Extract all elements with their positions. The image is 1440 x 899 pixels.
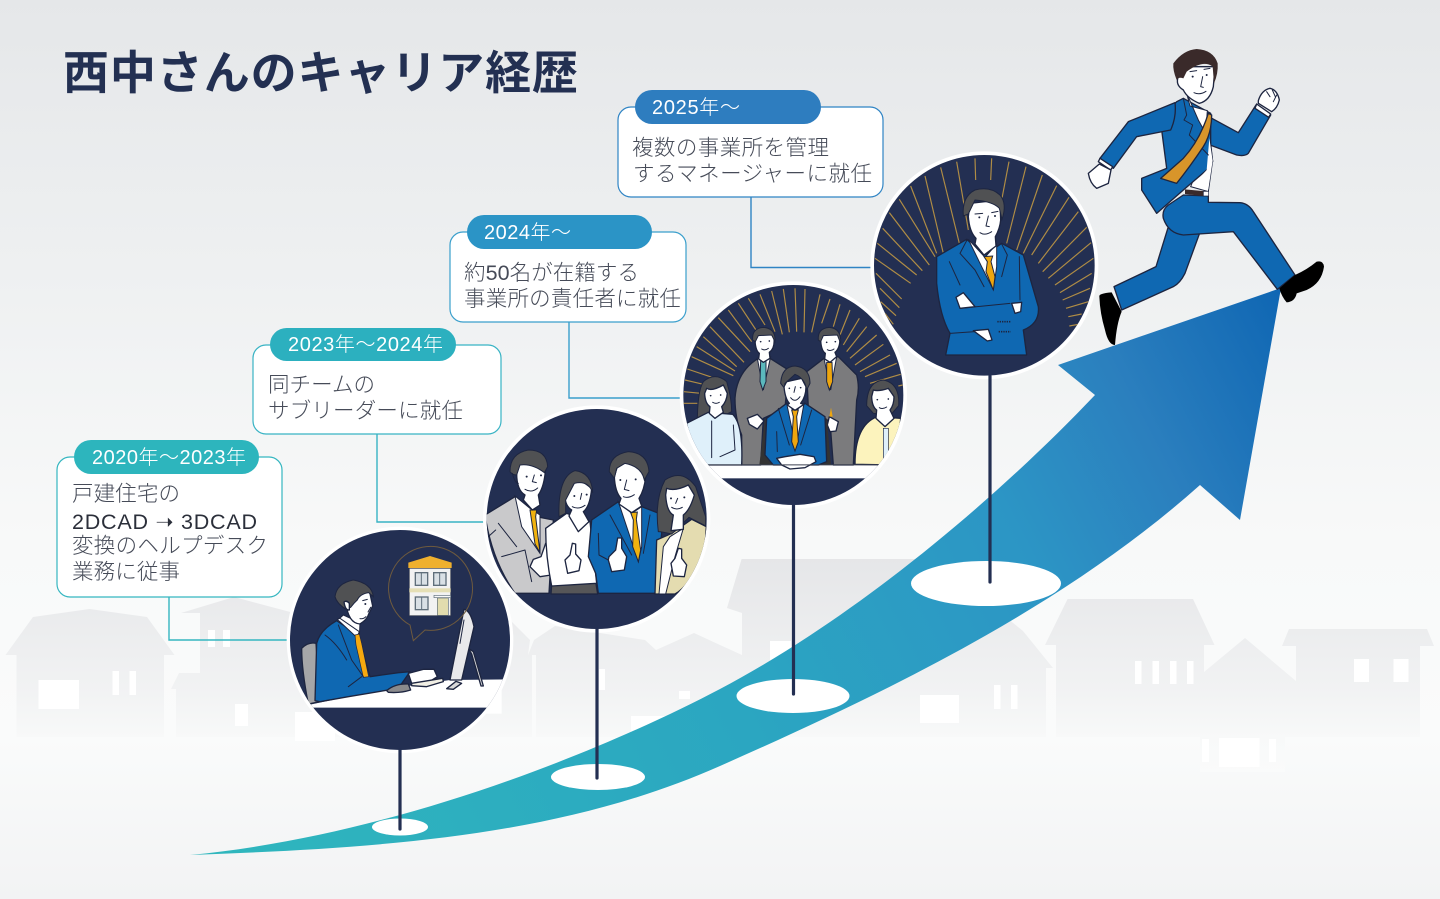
- connector 2: [377, 434, 489, 522]
- callout 3: 2024: 2024年〜: [484, 221, 571, 244]
- circle 2: team thumbs up: [483, 405, 710, 633]
- career growth arrow: [190, 288, 1281, 855]
- desk: [308, 679, 513, 708]
- callout 4: 2025: 2025年〜: [652, 96, 740, 119]
- callout 1: 2020-2023: 戸建住宅の: [72, 482, 180, 506]
- thought bubble with house: [389, 546, 473, 641]
- front leg: [1163, 195, 1295, 289]
- worker: [315, 580, 437, 702]
- person: right woman: [855, 380, 901, 465]
- monitor: [447, 609, 483, 689]
- person: woman in white shirt: [546, 471, 598, 594]
- title: 西中さんのキャリア経歴: [63, 47, 578, 99]
- front arm and hand: [1088, 103, 1175, 188]
- callout 3: 2024: 約50名が在籍する: [464, 261, 639, 285]
- person: back left man: [735, 327, 788, 465]
- connector 4: [751, 197, 876, 268]
- person: left woman: [687, 377, 742, 465]
- callout 1: 2020-2023: [57, 440, 282, 597]
- callout 3: 2024: [450, 215, 686, 322]
- callout 4: 2025: 複数の事業所を管理: [632, 136, 829, 160]
- callout 1: 2020-2023: 2DCAD ➝ 3DCAD: [72, 510, 257, 534]
- connector 3: [569, 322, 685, 398]
- callout 3: 2024: 事業所の責任者に就任: [464, 287, 681, 311]
- callout 4: 2025: [618, 90, 883, 197]
- circle 3: managing team: [680, 281, 910, 509]
- stem 2: [595, 629, 599, 778]
- keyboard and mouse: [387, 678, 443, 693]
- back shoe: [1099, 292, 1122, 345]
- milestone ellipse 3: [736, 679, 850, 713]
- person: man in blue suit: [588, 452, 662, 593]
- head: [1173, 49, 1218, 103]
- background: house silhouettes: [6, 559, 1434, 772]
- milestone ellipse 4: [911, 561, 1061, 606]
- torso: [1142, 93, 1213, 213]
- callout 1: 2020-2023: 変換のヘルプデスク: [72, 534, 268, 558]
- person: man in gray jacket: [485, 450, 553, 593]
- sun rays: [683, 288, 903, 403]
- front shoe: [1279, 261, 1324, 302]
- connector 1: [169, 597, 292, 640]
- callout 2: 2023-2024: 同チームの: [268, 373, 375, 397]
- circle 1: helpdesk worker: [287, 527, 513, 753]
- manager figure: [937, 189, 1038, 355]
- running man: [1088, 49, 1324, 345]
- chair: [302, 643, 320, 704]
- callout 1: 2020-2023: 2020年〜2023年: [92, 446, 246, 469]
- desk band: [708, 465, 878, 478]
- person: front man in blue: [759, 366, 831, 469]
- stem 1: [398, 750, 402, 829]
- callout 2: 2023-2024: サブリーダーに就任: [268, 399, 463, 423]
- back leg: [1114, 227, 1199, 310]
- circle 4: manager with crossed arms: [870, 151, 1098, 379]
- person: woman in beige jacket: [655, 475, 706, 594]
- callout 2: 2023-2024: 2023年〜2024年: [288, 333, 443, 356]
- stem 3: [792, 505, 795, 694]
- callout 1: 2020-2023: 業務に従事: [72, 560, 180, 584]
- milestone ellipse 1: [372, 818, 428, 836]
- milestone ellipse 2: [551, 764, 645, 790]
- person: back right man: [807, 327, 858, 465]
- stem 4: [988, 376, 992, 582]
- callout 4: 2025: するマネージャーに就任: [633, 162, 872, 186]
- callout 2: 2023-2024: [253, 328, 501, 434]
- sun rays: [875, 158, 1093, 326]
- back arm and fist: [1210, 88, 1279, 156]
